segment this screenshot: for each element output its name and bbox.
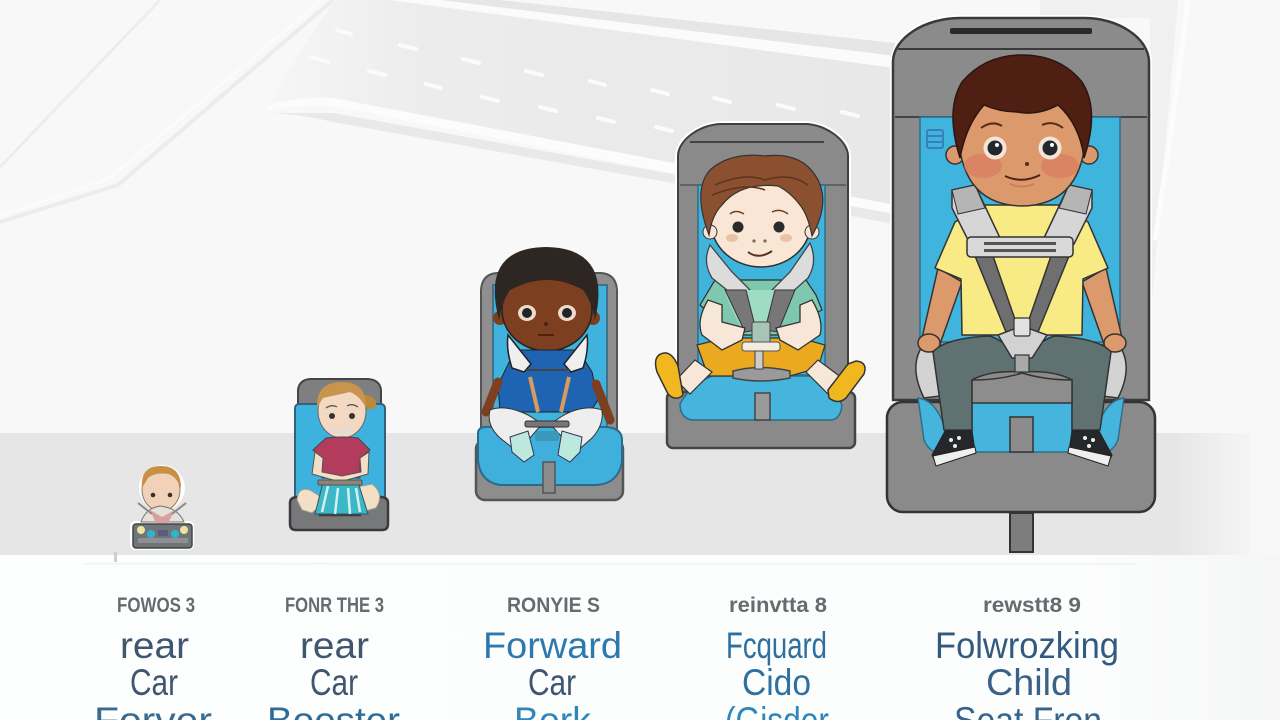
child head xyxy=(946,55,1098,206)
large seat shell xyxy=(887,18,1155,512)
newborn head xyxy=(139,465,185,511)
stage 3 second line: Car xyxy=(528,662,576,703)
toddler blue shirt xyxy=(498,350,598,412)
stage 4 small label: reinvtta 8 xyxy=(729,594,827,617)
forward seat center pad xyxy=(733,368,790,381)
seat logo icon xyxy=(927,130,943,148)
toddler seat shell xyxy=(476,273,623,500)
stage column 2 text xyxy=(267,594,400,720)
child shoes xyxy=(932,431,1112,466)
forward seat legs and shoes xyxy=(656,353,865,402)
center seat block xyxy=(972,373,1072,452)
child yellow shirt xyxy=(935,205,1108,335)
toddler legs and socks xyxy=(489,408,602,462)
seat 4: forward-facing car seat xyxy=(656,124,865,448)
forward seat shirt xyxy=(700,280,822,335)
stage column 3 text xyxy=(483,594,622,720)
forward seat shell xyxy=(667,124,855,448)
stage column 1 text xyxy=(94,594,212,720)
seat 1: newborn car seat xyxy=(130,465,194,550)
child harness xyxy=(952,185,1092,332)
stage 4 second line: Cido xyxy=(742,662,811,703)
seat 5: large child seat xyxy=(887,18,1155,552)
child legs xyxy=(933,336,1111,430)
stage 3 small label: RONYIE S xyxy=(507,594,600,617)
stage 1 small label: FOWOS 3 xyxy=(117,594,195,617)
newborn harness and body xyxy=(138,503,186,523)
stage 2 second line: Car xyxy=(310,662,358,703)
infant head xyxy=(317,382,376,438)
crotch buckle xyxy=(998,318,1047,372)
stage 4 first line: Fcquard xyxy=(726,625,827,666)
infant seat shell xyxy=(290,379,388,530)
forward seat head xyxy=(701,155,823,267)
forward seat arms xyxy=(700,300,821,350)
infant red shirt xyxy=(313,437,370,478)
newborn seat base xyxy=(133,524,192,548)
toddler collar and harness xyxy=(508,335,588,412)
seat 3: toddler car seat xyxy=(476,247,623,500)
stage 2 small label: FONR THE 3 xyxy=(285,594,384,617)
stage column 4 text xyxy=(725,594,829,720)
forward seat shorts xyxy=(697,338,825,376)
toddler arms xyxy=(486,382,610,420)
seat post xyxy=(1010,513,1033,552)
stage 2 first line: rear xyxy=(300,625,369,666)
infant arms and legs xyxy=(297,452,380,514)
stage 1 first line: rear xyxy=(120,625,189,666)
forward seat harness xyxy=(706,243,814,369)
stage 5 second line: Child xyxy=(986,662,1072,703)
stage 5 small label: rewstt8 9 xyxy=(983,594,1081,617)
child arms xyxy=(918,268,1126,352)
toddler head xyxy=(493,247,600,351)
stage 5 first line: Folwrozking xyxy=(935,625,1119,666)
stage column 5 text xyxy=(935,594,1119,720)
stage 3 first line: Forward xyxy=(483,625,622,666)
seat 2: infant car seat xyxy=(290,379,388,530)
stage 1 second line: Car xyxy=(130,662,178,703)
